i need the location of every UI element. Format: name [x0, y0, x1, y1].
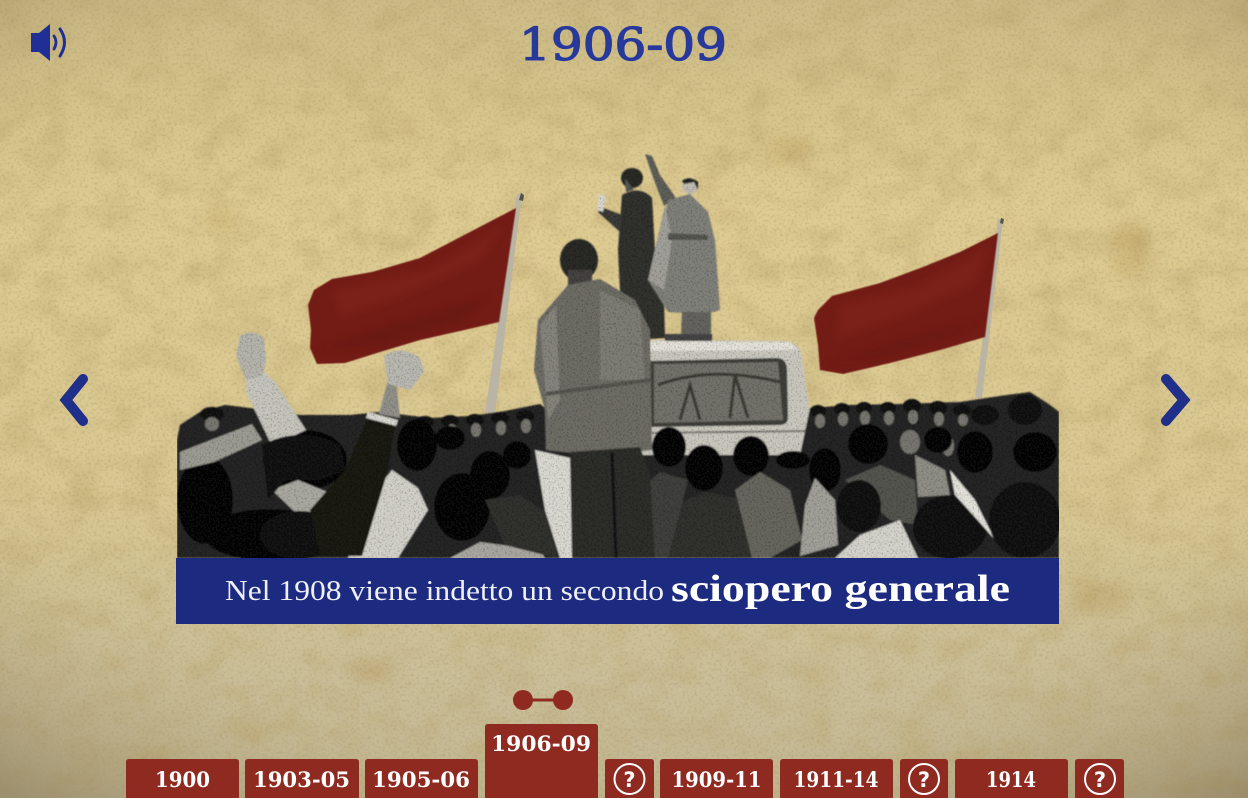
tab question: ? [623, 768, 636, 792]
arrow: previous [66, 379, 83, 421]
mid row dark heads [177, 419, 1057, 561]
van [640, 338, 811, 456]
tab 1903-05 [245, 759, 359, 798]
tab 1911-14: 1911-14 [794, 767, 878, 792]
tab question: ? [1094, 768, 1106, 792]
tab 1905-06: 1905-06 [372, 767, 470, 792]
timeline tabs [126, 724, 1124, 798]
tab 1911-14 [780, 759, 893, 798]
icon: speaker [31, 24, 64, 61]
caption bar [176, 558, 1059, 624]
raised fists [180, 332, 424, 556]
tab 1905-06 [365, 759, 478, 798]
clothing tones [669, 492, 751, 558]
tab 1914: 1914 [986, 767, 1036, 792]
tab question: ? [918, 768, 930, 792]
arrow: next [1166, 379, 1184, 421]
standing man [534, 239, 655, 558]
tab question [605, 759, 654, 798]
left flag [308, 193, 524, 414]
tab 1909-11: 1909-11 [672, 767, 762, 792]
icon: selected period connector [513, 690, 573, 710]
title: 1906-09 [519, 18, 727, 71]
woman with raised arm [645, 154, 720, 341]
caption bar: sciopero generale [671, 568, 1010, 610]
cleric figure [597, 168, 665, 340]
tab question [900, 759, 948, 798]
tab 1914 [955, 759, 1068, 798]
back row faces [205, 410, 968, 456]
back row hair [200, 395, 1042, 428]
tab question [1075, 759, 1124, 798]
crowd mass [177, 392, 1061, 561]
photo collage: protest scene [177, 154, 1061, 561]
tab 1900 [126, 759, 239, 798]
caption bar: Nel 1908 viene indetto un secondo [225, 575, 664, 607]
right flag [814, 218, 1004, 398]
tab 1903-05: 1903-05 [253, 767, 350, 792]
tab 1906-09 active: 1906-09 [491, 731, 591, 756]
tab 1909-11 [660, 759, 773, 798]
tab 1900: 1900 [155, 767, 210, 792]
tab 1906-09 active [485, 724, 598, 798]
